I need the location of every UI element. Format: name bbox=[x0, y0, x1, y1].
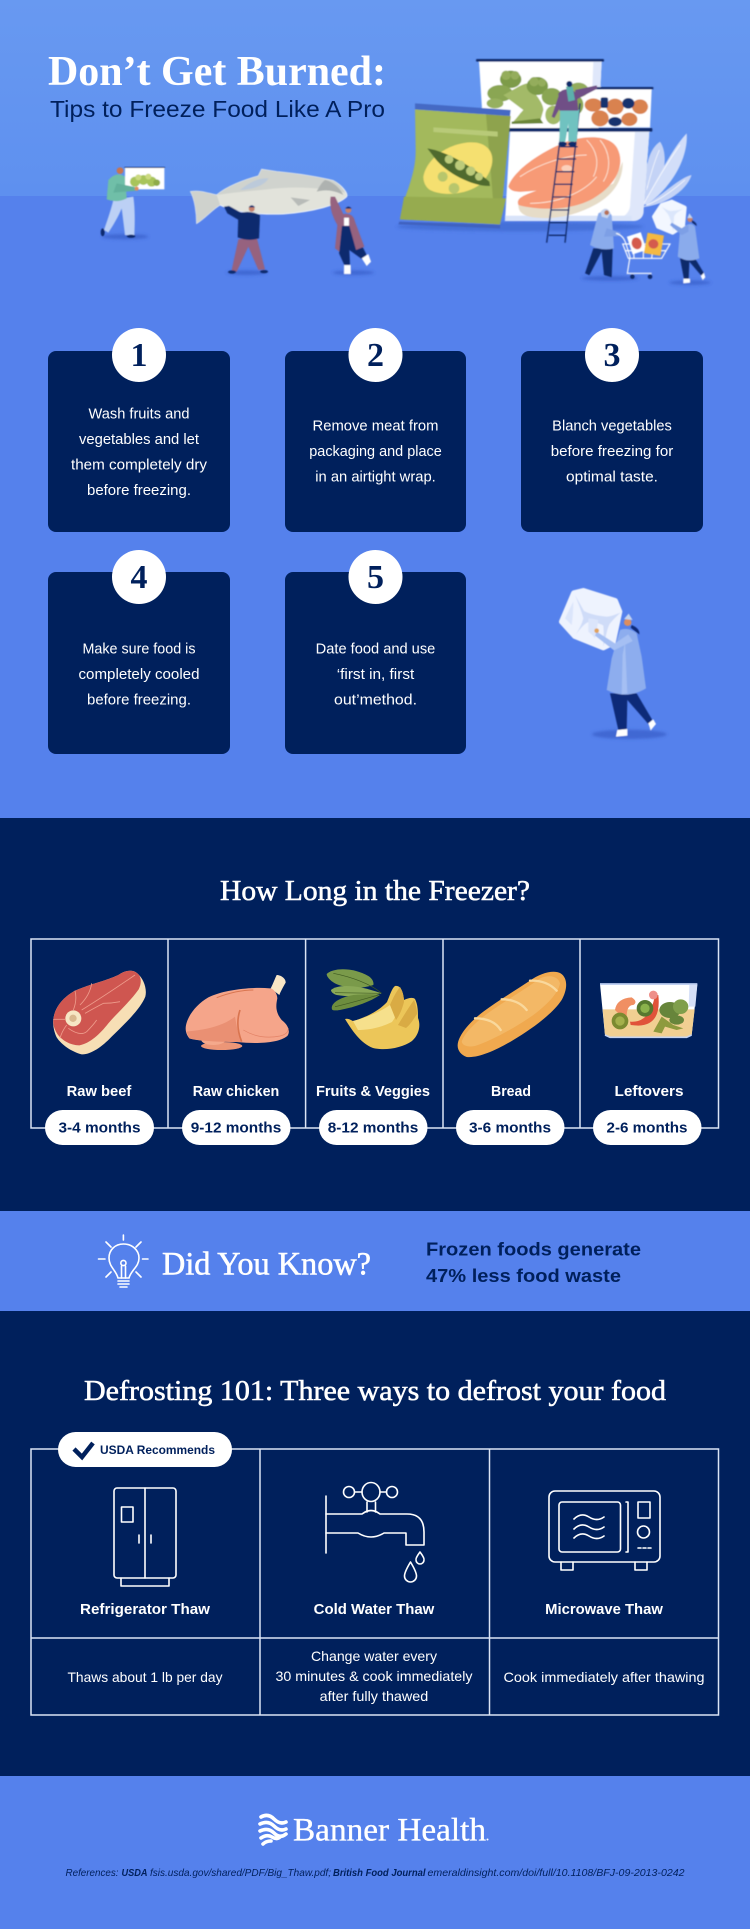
method details: after fully thawed bbox=[320, 1688, 428, 1704]
hero title block bbox=[48, 49, 386, 122]
card: tip 3: Blanch vegetables bbox=[552, 419, 672, 435]
card: tip 4: before freezing. bbox=[87, 693, 191, 709]
table grid bbox=[31, 939, 718, 1128]
icon: woman carrying fish bbox=[330, 197, 374, 275]
card: tip 2: 2 bbox=[367, 337, 384, 374]
storage duration pills bbox=[45, 1110, 702, 1145]
card: tip 3: before freezing for bbox=[551, 444, 673, 460]
icon: greens container bbox=[476, 59, 604, 130]
illustration: person carrying ice cube bbox=[562, 591, 667, 739]
panel: how long in the freezer bbox=[0, 818, 750, 1211]
icon: microwave bbox=[549, 1491, 660, 1570]
item labels: Raw chicken bbox=[193, 1084, 279, 1100]
card: tip 4: completely cooled bbox=[78, 667, 200, 683]
badge: USDA recommends: USDA Recommends bbox=[100, 1445, 215, 1457]
icon: fruits and veggies bbox=[327, 969, 419, 1049]
card: tip 1: Wash fruits and bbox=[88, 406, 190, 422]
icon: ladder bbox=[547, 103, 580, 243]
fact text bbox=[426, 1240, 641, 1286]
icon: cold water faucet bbox=[326, 1482, 424, 1582]
item labels: Leftovers bbox=[614, 1084, 684, 1100]
card: tip 5: 5 bbox=[367, 559, 384, 596]
method details: 30 minutes & cook immediately bbox=[276, 1668, 472, 1684]
illustration: giant freezer containers scene bbox=[397, 59, 711, 285]
panel: defrosting 101 bbox=[0, 1311, 750, 1776]
badge: USDA recommends bbox=[58, 1432, 232, 1467]
card: tip 2: Remove meat from bbox=[312, 419, 438, 435]
references: References: bbox=[66, 1867, 119, 1879]
panel: freezing tips bbox=[48, 328, 703, 754]
storage duration pills: 9-12 months bbox=[191, 1121, 281, 1137]
references: fsis.usda.gov/shared/PDF/Big_Thaw.pdf; bbox=[150, 1867, 331, 1879]
method details: Cook immediately after thawing bbox=[504, 1669, 704, 1685]
method labels: Microwave Thaw bbox=[545, 1602, 664, 1618]
card: tip 1: before freezing. bbox=[87, 483, 191, 499]
storage duration pills: 3-6 months bbox=[469, 1121, 551, 1137]
icon: salmon steak bbox=[508, 137, 623, 218]
table grid bbox=[31, 1449, 718, 1715]
icon: person with ice cube bbox=[654, 202, 711, 285]
icon: refrigerator bbox=[114, 1488, 176, 1586]
heading: How Long in the Freezer? bbox=[220, 875, 530, 907]
method labels: Refrigerator Thaw bbox=[80, 1602, 211, 1618]
item labels: Raw beef bbox=[67, 1084, 131, 1100]
panel: footer bbox=[0, 1776, 750, 1929]
icon: light bulb bbox=[98, 1235, 148, 1287]
method details: Change water every bbox=[311, 1648, 437, 1664]
heading: Did You Know? bbox=[162, 1247, 371, 1283]
logo: Banner Health: Banner Health bbox=[293, 1813, 486, 1849]
fact text: Frozen foods generate bbox=[426, 1240, 641, 1260]
fact text: 47% less food waste bbox=[426, 1266, 621, 1286]
storage duration pills: 2-6 months bbox=[606, 1121, 688, 1137]
icon: person on ladder bbox=[552, 81, 597, 146]
card: tip 2: in an airtight wrap. bbox=[315, 470, 436, 486]
icon: raw beef bbox=[53, 971, 146, 1054]
method labels bbox=[80, 1602, 664, 1618]
icon: berries container bbox=[580, 87, 653, 127]
references: emeraldinsight.com/doi/full/10.1108/BFJ-09-2013-0242 bbox=[428, 1867, 685, 1879]
illustration: fish carriers and person with container bbox=[101, 167, 374, 275]
card: tip 5 bbox=[285, 550, 466, 754]
card: tip 3: 3 bbox=[604, 337, 620, 374]
card: tip 4 bbox=[48, 550, 230, 754]
card: tip 1: them completely dry bbox=[71, 458, 208, 474]
card: tip 4: 4 bbox=[130, 559, 148, 596]
icon: shopper with cart bbox=[582, 209, 670, 281]
card: tip 5: out’method. bbox=[334, 693, 417, 709]
icon: bread bbox=[458, 972, 566, 1057]
storage duration pills: 3-4 months bbox=[58, 1121, 140, 1137]
subtitle: Tips to Freeze Food Like A Pro bbox=[50, 96, 385, 122]
method details bbox=[68, 1648, 704, 1704]
card: tip 1: 1 bbox=[130, 337, 148, 374]
card: tip 3: optimal taste. bbox=[566, 470, 658, 486]
card: tip 4: Make sure food is bbox=[82, 642, 196, 658]
item labels: Fruits & Veggies bbox=[316, 1084, 430, 1100]
panel: hero and tips background bbox=[0, 0, 750, 818]
icon: giant fish bbox=[191, 169, 347, 223]
card: tip 1: vegetables and let bbox=[79, 432, 199, 448]
title: Don’t Get Burned: bbox=[48, 49, 386, 95]
storage duration pills: 8-12 months bbox=[328, 1121, 418, 1137]
method labels: Cold Water Thaw bbox=[314, 1602, 435, 1618]
icon: leftovers container bbox=[600, 984, 697, 1037]
card: tip 2 bbox=[285, 328, 466, 532]
icon: person carrying greens container bbox=[101, 167, 165, 239]
icon: raw chicken bbox=[186, 975, 289, 1050]
references bbox=[66, 1867, 685, 1879]
icon: decorative leaves bbox=[642, 133, 692, 207]
item labels bbox=[67, 1084, 683, 1100]
method details: Thaws about 1 lb per day bbox=[68, 1669, 222, 1685]
card: tip 2: packaging and place bbox=[309, 444, 442, 460]
item labels: Bread bbox=[491, 1084, 531, 1100]
icon: frozen peas bag bbox=[398, 103, 511, 228]
heading: Defrosting 101: Three ways to defrost your food bbox=[84, 1375, 667, 1407]
references: USDA bbox=[122, 1867, 148, 1879]
references: British Food Journal bbox=[333, 1867, 426, 1879]
card: tip 3 bbox=[521, 328, 703, 532]
icon: man carrying fish bbox=[224, 205, 268, 275]
card: tip 1 bbox=[48, 328, 230, 532]
icon: salmon container bbox=[505, 128, 652, 221]
panel: did you know bbox=[0, 1211, 750, 1311]
card: tip 5: Date food and use bbox=[316, 642, 435, 658]
card: tip 5: ‘first in, first bbox=[337, 667, 414, 683]
